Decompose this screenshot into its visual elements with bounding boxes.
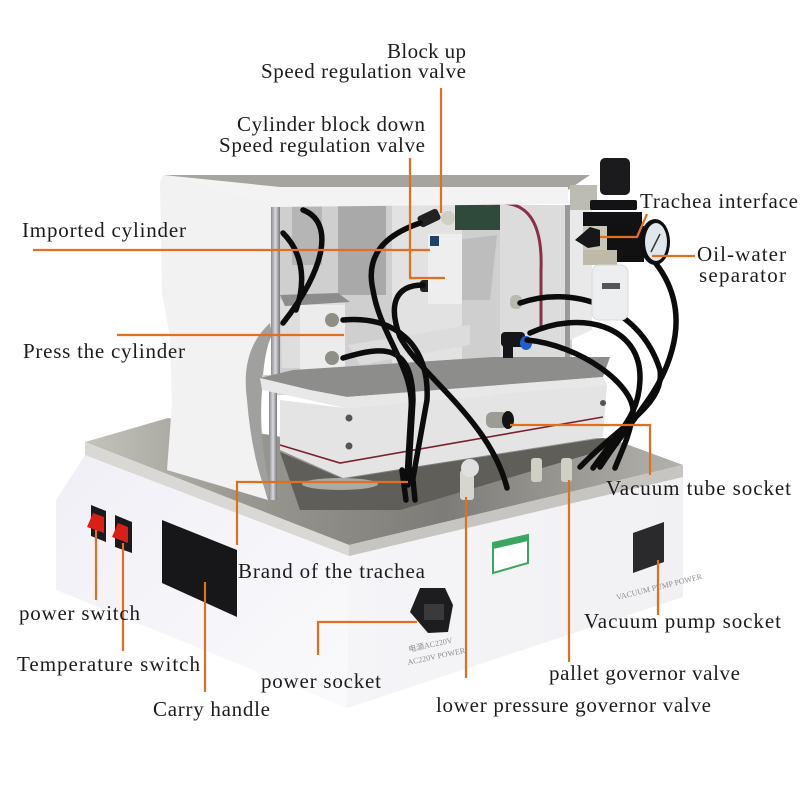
labels: Vacuum pump socket — [584, 609, 781, 633]
red rocker switches — [87, 505, 132, 553]
labels: power socket — [261, 669, 381, 693]
carriage — [260, 357, 610, 478]
certificate label — [493, 535, 528, 573]
guide rods — [262, 207, 300, 500]
labels: Block up — [387, 39, 466, 63]
machine illustration — [56, 158, 704, 708]
press block — [280, 293, 350, 370]
frame top bar — [163, 175, 590, 207]
labels: Press the cylinder — [23, 339, 185, 363]
labels: pallet governor valve — [549, 661, 740, 685]
left side panel — [160, 175, 272, 500]
labels: Vacuum tube socket — [606, 476, 791, 500]
labels: Imported cylinder — [22, 218, 186, 242]
labels: Speed regulation valve — [261, 59, 466, 83]
pneumatic tubes — [283, 210, 676, 500]
labels: Brand of the trachea — [238, 559, 426, 583]
callout lines — [33, 88, 695, 692]
air regulator and gauge — [570, 158, 670, 320]
base top plate — [85, 418, 683, 556]
labels: Carry handle — [153, 697, 270, 721]
base body — [56, 442, 683, 708]
fittings — [325, 208, 532, 429]
vacuum pump socket: VACUUM PUMP POWER — [615, 572, 704, 602]
labels: Temperature switch — [17, 652, 200, 676]
labels: Trachea interface — [640, 189, 798, 213]
power socket — [407, 588, 467, 667]
power socket: AC220V POWER — [407, 646, 467, 667]
power socket: 电源AC220V — [407, 635, 454, 654]
carry handle — [162, 520, 237, 617]
under carriage — [280, 438, 620, 510]
vacuum pump socket — [615, 522, 704, 602]
labels: Cylinder block down — [237, 112, 426, 136]
labels: separator — [699, 263, 786, 287]
labels: Speed regulation valve — [219, 133, 425, 157]
upper frame interior — [272, 200, 592, 395]
labels: Oil-water — [697, 242, 786, 266]
labels: power switch — [19, 601, 140, 625]
labels: lower pressure governor valve — [436, 693, 711, 717]
governor valves — [460, 458, 572, 500]
